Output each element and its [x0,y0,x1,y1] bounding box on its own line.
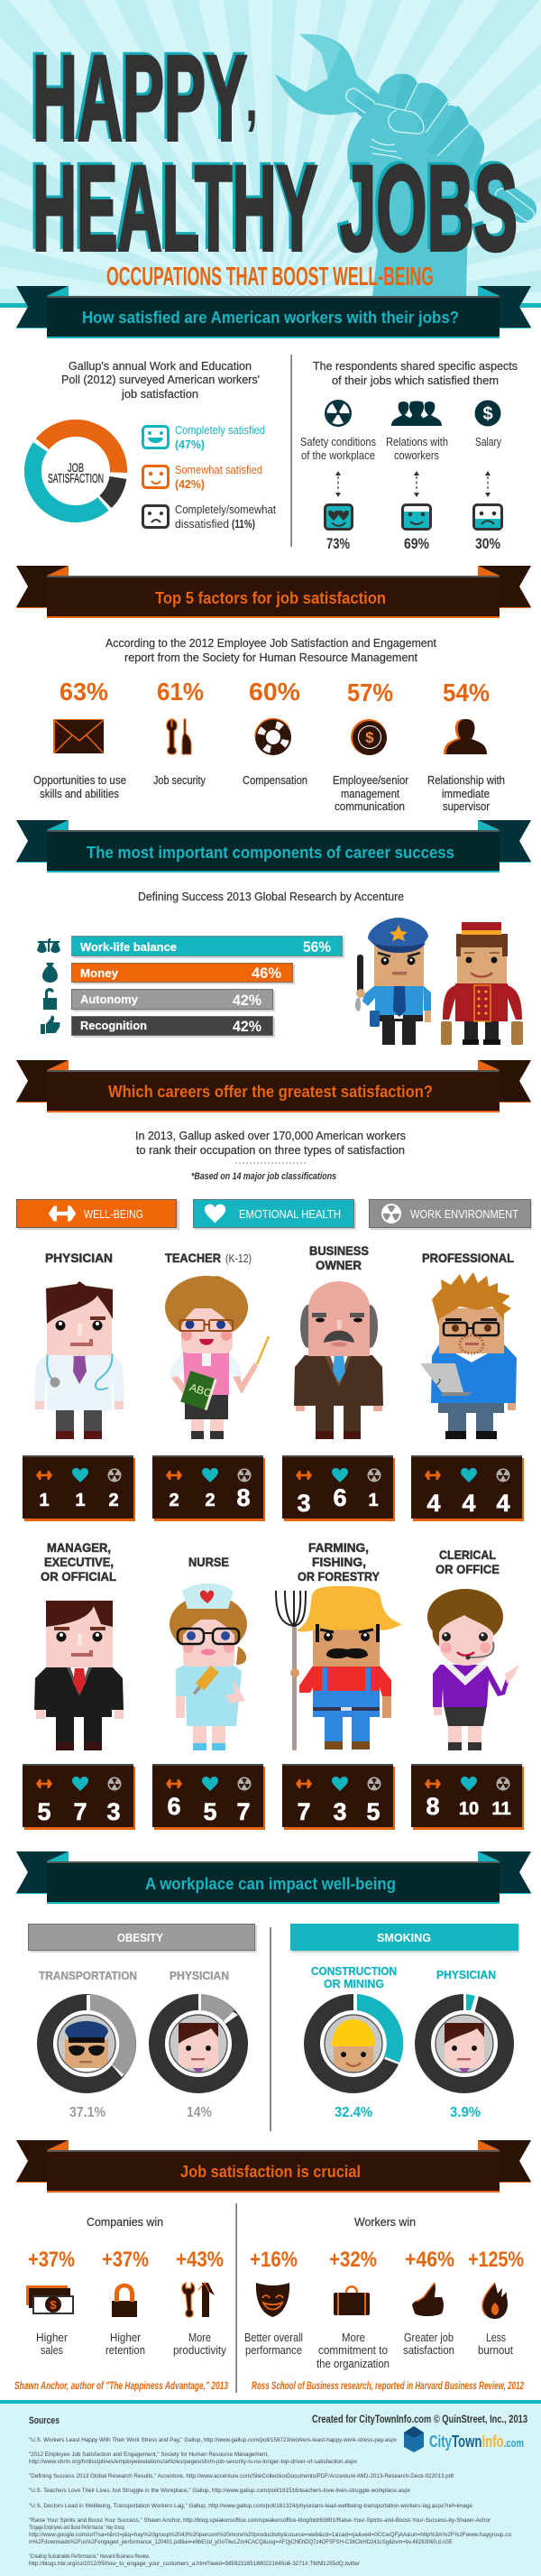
name: manager: OR OFFICIAL [41,1569,116,1583]
intro: Gallup 170,000: In 2013, Gallup asked over 170,000 American workers [135,1129,406,1142]
source list: "U.S. Doctors Lead in Wellbeing, Transportation Workers Lag," Gallup, http://www.gallup.com/poll/161324/physicians-lead-wellbeing-transportation-workers-lag.aspx?ref=image [29,2503,472,2509]
panel: Gallup poll [32,359,276,531]
legend: emotional health: EMOTIONAL HEALTH [239,1207,341,1221]
score box: physician: 1 [39,1491,50,1510]
source list: "Creating Sustainable Performance," Harvard Business Review, [29,2553,150,2560]
legend: somewhat satisfied: (42%) [175,477,205,491]
name: manager: EXECUTIVE, [44,1555,114,1569]
aspects intro text [313,359,518,387]
icon: money [26,2285,74,2314]
legend: somewhat satisfied [142,463,262,491]
panel: nurse [152,1555,265,1830]
character: business owner [294,1281,383,1439]
legend: dissatisfied: (11%) [232,517,255,531]
intro: Gallup 170,000: to rank their occupation on three types of satisfaction [136,1143,405,1157]
percentages: 57% [347,679,393,706]
percentages: companies [28,2248,224,2272]
poll intro text: Gallup's annual Work and Education [69,359,252,373]
percentages: 54% [443,679,490,706]
percentages: companies: +37% [28,2248,75,2272]
percentages: workers: +32% [329,2248,377,2272]
labels: win benefits: More [342,2331,365,2344]
legend: work environment: WORK ENVIRONMENT [410,1207,518,1221]
name: manager [41,1540,116,1583]
banner: top 5 factors [16,566,531,618]
banner: career success: The most important components of career success [87,843,454,862]
title: Happy, Healthy Jobs [30,29,518,276]
header: obesity: OBESITY [117,1931,163,1944]
score face: 69%: 69% [404,535,429,552]
bar: work-life balance: 56% [303,938,331,956]
label: physician: PHYSICIAN [436,1969,496,1981]
intro: Gallup 170,000: *Based on 14 major job classifications [191,1171,336,1182]
score box: professional: 4 [462,1490,476,1517]
panel: smoking [290,1924,519,2120]
source list: http://www.shrm.org/hrdisciplines/employeerelations/articles/pages/shrm-job-security-is-no-longer-top-driver-of-satisfaction.aspx [29,2459,358,2465]
score box: teacher: 8 [236,1484,251,1511]
name: business owner [309,1243,369,1272]
percentages: workers [250,2248,524,2272]
score face: 73% [325,505,352,552]
donut: job satisfaction: JOB [68,460,84,475]
score box: professional: 4 [426,1490,441,1517]
factor labels: Job security [153,773,206,787]
legend: dissatisfied: dissatisfied [175,517,229,531]
character: bellhop [441,922,523,1045]
label: construction or mining [311,1965,397,1990]
factor labels: skills and abilities [40,787,119,800]
intro: Gallup 170,000 [135,1129,406,1182]
icon: flame [482,2283,508,2319]
poll intro text [61,359,260,401]
donut: construction 32.4% [312,1992,404,2085]
icon: coworkers [391,401,442,426]
score box: manager: 7 [73,1798,87,1825]
score face: 73%: 73% [326,535,350,552]
score box: professional [411,1455,524,1521]
score box: nurse: 7 [236,1798,251,1825]
heading: companies win: Companies win [87,2215,163,2229]
character: farmer [276,1586,402,1750]
labels: win benefits: Greater job [404,2331,454,2344]
labels: win benefits: performance [245,2343,302,2357]
icon: salary dollar [474,401,501,426]
legend: somewhat satisfied: Somewhat satisfied [175,463,262,476]
source list: "U.S. Workers Least Happy With Their Work Stress and Pay," Gallup, http://www.gallup.com/poll/158723/workers-least-happy-work-stress-pay.aspx [29,2437,398,2443]
panel: clerical [411,1547,524,1830]
character: physician [34,1281,124,1439]
legend: well-being [16,1200,179,1230]
score face: 30% [474,505,501,552]
banner: workplace impact [16,1851,531,1904]
score box: business owner [282,1455,395,1521]
score box: farmer [282,1764,395,1830]
bar: autonomy [72,989,275,1011]
banner: which careers [16,1060,531,1113]
bar: money: Money [80,966,119,980]
legend: completely satisfied: (47%) [175,438,205,451]
panel: companies win [26,2215,224,2317]
title: Happy, Healthy Jobs: , [245,57,258,136]
aspects intro text: The respondents shared specific aspects [313,359,518,373]
labels: win benefits: Higher [36,2331,69,2344]
logo: CityTownInfo [404,2426,524,2452]
labels: win benefits: productivity [173,2343,226,2357]
bar chart: career success [37,937,344,1038]
factor labels: Relationship with [427,773,505,787]
character: teacher: ABC [188,1380,214,1399]
intro text: report from the Society for Human Resource Management [124,651,417,664]
bar: money: 46% [252,965,281,982]
name: clerical [436,1547,500,1576]
score box: manager: 5 [37,1798,51,1825]
source list: "Defining Success 2013 Global Research Results," Accenture, http://www.accenture.com/SiteCollectionDocuments/PDF/Accenture-IWD-2013-Research-Deck-022013.pdf [29,2473,454,2479]
banner: job satisfaction crucial [16,2140,531,2193]
banner: workplace impact: A workplace can impact well-being [145,1874,396,1893]
value: 32.4%: 32.4% [335,2105,372,2120]
score box: business owner: 6 [333,1484,347,1511]
percentages: 61% [157,678,204,706]
panel: footer sources [0,2400,541,2576]
character: nurse [170,1583,247,1750]
header: smoking: SMOKING [377,1931,431,1944]
percentages [60,678,490,706]
poll intro text: Poll (2012) surveyed American workers' [61,373,260,386]
labels: win benefits: retention [105,2343,145,2357]
legend: emotional health [193,1200,356,1230]
labels: win benefits: Better overall [244,2331,303,2344]
icon: wrench and hammer [182,2283,215,2317]
percentages: companies: +37% [102,2248,149,2272]
score box: clerical: 10 [459,1799,479,1819]
factor labels: supervisor [443,799,491,813]
score box: business owner: 1 [368,1491,379,1510]
name: farming: OR FORESTRY [298,1569,381,1583]
factor labels: Opportunities to use [33,773,126,787]
score box: clerical: 8 [426,1793,440,1820]
name: nurse: NURSE [188,1555,229,1569]
factor labels: immediate [442,787,490,800]
labels: win benefits: commitment to [318,2343,388,2357]
header: smoking [290,1924,519,1953]
icon: fist gripping wrench [275,34,536,296]
banner: how satisfied: How satisfied are American workers with their jobs? [82,308,459,327]
citations [14,2381,524,2392]
legend: rating types [16,1200,532,1230]
source list: http://blogs.hbr.org/cs/2012/05/how_to_engage_your_customers_a.html?awid=5859231651880221645o6-3271#.T6tNfzJS5dQ.twitter [29,2561,361,2567]
legend: completely satisfied [142,423,265,451]
score box: teacher: 2 [205,1491,215,1510]
score box: farmer: 7 [297,1798,311,1825]
name: teacher: TEACHER [165,1251,221,1265]
panel: workers win [250,2215,524,2319]
percentages: workers: +125% [468,2248,524,2272]
factor labels: communication [335,799,405,813]
score face: 69% [402,505,431,552]
name: farming [298,1540,381,1583]
bar: recognition: 42% [233,1018,261,1035]
aspects intro text: of their jobs which satisfied them [332,374,499,387]
labels: win benefits: satisfaction [403,2343,454,2357]
value: 37.1%: 37.1% [69,2105,105,2120]
labels: win benefits: burnout [478,2343,513,2357]
logo: CityTownInfo: CityTownInfo.com [429,2433,524,2451]
aspect labels [300,435,501,462]
factor labels: Compensation [243,773,307,787]
character: clerical worker [427,1589,519,1750]
source list [29,2437,511,2567]
icon: lock [112,2284,137,2317]
name: business owner: OWNER [316,1258,362,1272]
legend: dissatisfied: Completely/somewhat [175,503,276,516]
labels: win benefits [36,2331,513,2370]
icon: radiation [325,400,352,427]
name: farming: FISHING, [312,1555,366,1569]
banner: top 5 factors: Top 5 factors for job satisfaction [155,588,386,607]
labels: win benefits: Higher [110,2331,142,2344]
label: construction or mining: OR MINING [324,1978,384,1990]
source list: "Raise Your Spirits and Boost Your Success," Shawn Anchor, http://blog.speakersoffice.com/speakersoffice-blog/bid/63891/Raise-Your-Spirits-and-Boost-Your-Success-by-Shawn-Achor [29,2517,491,2524]
bar: money [72,964,295,984]
intro text [105,636,436,664]
source list: "U.S. Teachers Love Their Lives, but Struggle in the Workplace," Gallup, http://www.gallup.com/poll/161516/teachers-love-lives-struggle-workplace.aspx [29,2488,411,2494]
score box: manager [23,1764,135,1830]
score box: clerical [411,1764,524,1830]
name: business owner: BUSINESS [309,1243,369,1258]
aspect labels: Safety conditions [300,435,376,448]
score box: nurse: 5 [203,1798,217,1825]
bar: work-life balance: Work-life balance [80,940,177,954]
percentages: 60% [249,678,300,706]
intro text: According to the 2012 Employee Job Satisfaction and Engagement [105,636,436,650]
panel: top 5 factors [33,636,505,813]
aspect labels: Relations with [386,435,448,448]
percentages: 63% [60,678,108,706]
score box: professional: 4 [496,1490,510,1517]
icon: tools [167,719,191,754]
score box: physician: 1 [75,1491,86,1510]
panel: farmer [276,1540,402,1830]
score box: business owner: 3 [297,1490,311,1517]
label: construction or mining: CONSTRUCTION [311,1965,397,1978]
panel: professional [411,1251,524,1521]
citations: Shawn Anchor, author of "The Happiness Advantage," 2013 [14,2381,228,2392]
aspect labels: Salary [475,435,501,448]
arrows: aspect to score [335,471,491,497]
aspect labels: of the workplace [301,448,375,462]
labels: win benefits: the organization [316,2357,390,2370]
legend: completely satisfied: Completely satisfied [175,423,265,437]
name: teacher: (K-12) [225,1251,252,1265]
bar: work-life balance [72,937,344,958]
score box: clerical: 11 [491,1799,511,1819]
heading: sources: Sources [29,2415,60,2426]
factor labels: Employee/senior [333,773,409,787]
icons: bar categories [37,938,60,1034]
icon: lifebuoy [255,719,289,752]
icon: briefcase [334,2286,370,2315]
header: obesity [29,1924,257,1953]
label: physician: PHYSICIAN [170,1970,229,1982]
icon: money: $ [50,2298,57,2312]
score box: physician: 2 [108,1491,119,1510]
banner: career success [16,820,531,873]
banner: job satisfaction crucial: Job satisfaction is crucial [180,2162,361,2181]
title: Happy, Healthy Jobs: HAPPY [30,29,244,163]
bar: autonomy: 42% [233,992,261,1009]
legend: dissatisfied [142,503,276,531]
bar: recognition: Recognition [80,1019,147,1032]
panel: aspects of satisfaction [300,359,518,552]
panel: manager [23,1540,135,1830]
score box: physician [23,1455,135,1521]
source line: Accenture: Defining Success 2013 Global Research by Accenture [138,890,404,903]
aspect labels: coworkers [394,448,439,462]
donut: job satisfaction: SATISFACTION [48,472,104,486]
icon: salary dollar: $ [482,404,493,424]
bar: autonomy: Autonomy [80,993,139,1006]
percentages: companies: +43% [176,2248,224,2272]
source list: http://www.google.com/url?sa=t&rct=j&q=hay%20group%2043%20percent%20more%20productivity&source=web&cd=1&cad=rja&ved=0CCwQFjAA&url=http%3A%2F%2Fwww.haygroup.co [29,2532,511,2538]
source list: "2012 Employee Job Satisfaction and Engagement," Society for Human Resource Management, [29,2451,269,2458]
score box: teacher: 2 [169,1491,179,1510]
donut: physician 3.9% [423,1992,506,2085]
icon: envelope [53,719,104,753]
name: clerical: OR OFFICE [436,1562,500,1576]
panel: business owner [282,1243,395,1521]
score box: nurse [152,1764,265,1830]
value: 14%: 14% [187,2105,212,2120]
labels: win benefits: sales [41,2343,63,2357]
legend: well-being: WELL-BEING [84,1207,143,1221]
labels: win benefits: Less [486,2331,506,2344]
score face: 30%: 30% [475,535,500,552]
value: 3.9%: 3.9% [450,2105,481,2120]
banner: which careers: Which careers offer the greatest satisfaction? [108,1082,433,1101]
name: physician: PHYSICIAN [45,1251,113,1265]
panel: physician [23,1251,135,1521]
character: police officer [355,918,431,1045]
character: teacher [165,1276,269,1439]
name: clerical: CLERICAL [439,1547,496,1562]
percentages: workers: +16% [250,2248,298,2272]
donut: physician 14% [157,1993,240,2085]
source list: m%2Fdownloads%2Fus%2Fengaged_performance_120401.pdf&ei=e6bEUd_yGoTiiwLZm4CACQ&usg=AFQjCNEhDQ7z4OFSFSH-C36CikHD241cSg&bvm=bv.48293060,d.cGE [29,2539,454,2545]
icon: coin: $ [365,729,374,746]
factor labels: management [341,787,399,800]
character: professional [420,1272,517,1439]
bar: recognition [72,1016,275,1038]
icon: mask [256,2283,289,2317]
name: professional: PROFESSIONAL [422,1251,514,1265]
icon: thumbs up [412,2283,444,2316]
heading: workers win: Workers win [354,2215,416,2229]
icon: coin [351,719,387,755]
labels: win benefits: More [188,2331,211,2344]
legend: work environment [370,1200,532,1230]
name: manager: MANAGER, [47,1540,111,1555]
score box: manager: 3 [106,1798,121,1825]
character: manager [34,1601,124,1750]
source list: "Engage Employees and Boost Performance," Hay Group, [29,2525,125,2531]
name: farming: FARMING, [308,1540,369,1555]
panel: teacher [152,1251,269,1521]
icon: person [444,719,487,754]
score box: nurse: 6 [167,1793,181,1820]
score box: teacher [152,1455,265,1521]
donut: transportation 37.1% [45,1994,136,2085]
label: transportation: TRANSPORTATION [39,1970,137,1982]
banner: how satisfied [16,286,531,338]
poll intro text: job satisfaction [121,387,198,401]
title: Happy, Healthy Jobs: HAPPY [32,32,247,166]
factor labels [33,773,505,813]
donut: job satisfaction [32,428,119,514]
score box: farmer: 3 [333,1798,347,1825]
score box: farmer: 5 [366,1798,381,1825]
panel: obesity [29,1924,257,2120]
percentages: workers: +46% [405,2248,454,2272]
